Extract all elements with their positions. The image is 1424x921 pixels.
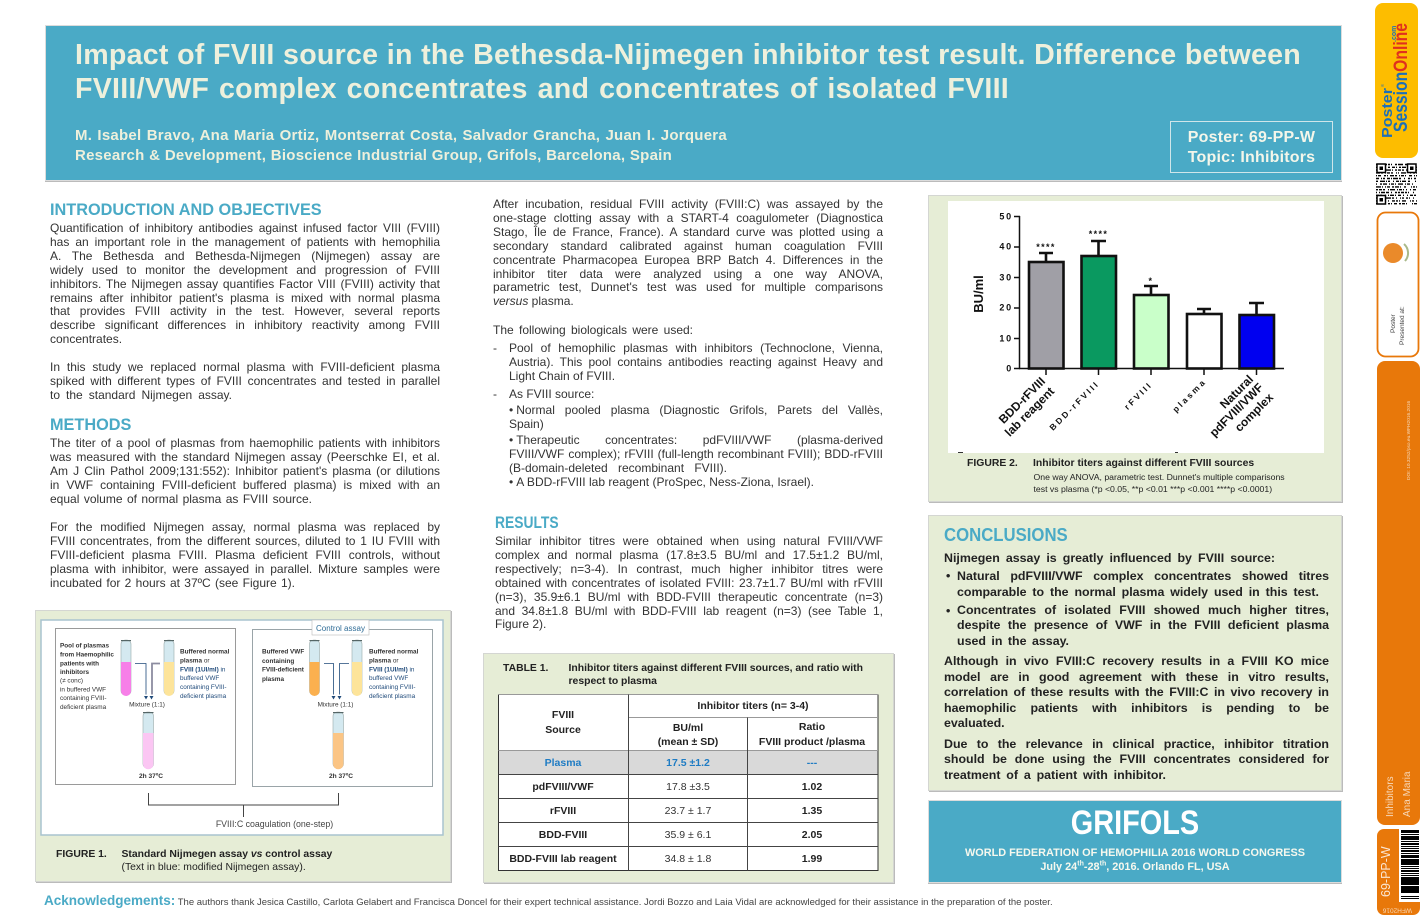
tube: VWF plasma [310,640,320,696]
title [75,39,1301,104]
conclusions text [944,551,1330,782]
x axis category labels: complex [1232,390,1276,435]
table header: Ratio [799,721,825,733]
bar: BDD-rFVIII [1082,241,1116,368]
text: assay and statistics paragraph: Stago, Île de France, France). A standard curve was plotted using a [493,225,883,239]
text: assay and statistics paragraph: concentrate Pharmacopea Europea BRP Batch 4. Differences in the [493,253,883,267]
figure 2 caption: Inhibitor titers against different FVIII sources [1033,458,1254,469]
text: introduction paragraph: Quantification of inhibitory antibodies against infused factor VIII (FVIII) [50,221,440,235]
control assay right label: Buffered normal [369,648,419,656]
significance stars: * [1149,276,1153,286]
standard assay left label: Pool of plasmas [60,642,109,650]
table rows: ratios: 1.02 [802,781,822,793]
control assay left label: Buffered VWF [262,648,304,656]
sidebar [1375,3,1420,915]
panel: figure 1 [35,610,451,882]
text: methods paragraph 1 [50,436,440,506]
control assay box [252,620,432,786]
table header: Source [545,724,581,736]
text: introduction paragraph: A. The Bethesda and Bethesda-Nijmegen (Nijmegen) assay are [50,249,440,263]
presented at text: Poster [1390,313,1397,333]
text: methods paragraph 2: FVIII-deficient plasma FVIII. Plasma deficient FVIII controls, without [50,548,440,562]
x axis category labels: pdFVIII/VWF [1207,380,1266,440]
table rows: titers: 35.9 ± 6.1 [665,829,711,841]
text: introduction paragraph: inhibitors. The Nijmegen assay quantifies Factor VIII (FVIII) activity that [50,277,440,291]
control assay label tab [312,620,369,635]
standard assay left label: from Haemophilic [60,652,114,658]
logo: PosterSessionOnline: .com [1391,26,1398,42]
poster and topic box: Topic: Inhibitors [1188,149,1315,166]
conclusions text: Due to the relevance in clinical practice, inhibitor titration [944,737,1329,751]
y axis: 10 [999,334,1013,344]
acknowledgements: Acknowledgements: The authors thank Jesica Castillo, Carlota Gelabert and Francisca Doncel for their expert technical assistance. Jordi Bozzo and Laia Vidal are acknowledged for their assistance in the preparation of the poster. [44,893,1053,908]
table rows: titers [665,781,711,865]
table header: FVIII [552,709,574,721]
text: results paragraph: Similar inhibitor titres were obtained when using natural FVIII/VWF [495,534,883,548]
figure 2 caption: One way ANOVA, parametric test. Dunnet's multiple comparisons [1034,472,1285,482]
table row: plasma: --- [807,757,818,769]
bar: plasma [1187,309,1222,368]
conclusions text: evaluated. [944,716,1005,730]
text: biologicals list [493,323,883,489]
text: methods paragraph 2 [50,520,440,590]
y axis: 0 [1006,364,1013,374]
title: FVIII/VWF complex concentrates and concentrates of isolated FVIII [75,72,1009,104]
text: methods paragraph 2: FVIII concentrates, from the different sources, diluted to 1 IU FVIII with [50,534,440,548]
text: biologicals list: •Normal pooled plasma (Diagnostic Grifols, Parets del Vallès, [509,403,883,417]
significance stars: **** [1036,242,1056,252]
conclusions text: Concentrates of isolated FVIII showed much higher titres, [957,603,1329,617]
footer banner: Grifols [929,801,1341,882]
heading: methods: METHODS [50,416,131,434]
congress presentation card: Presented at: [1399,306,1406,345]
mixture label: Mixture (1:1) [129,702,165,708]
text: results paragraph: respectively; n=3-4). In contrast, much higher inhibitor titres were [495,562,883,576]
conclusions text: Nijmegen assay is greatly influenced by FVIII source: [944,551,1275,565]
text: biologicals list: (B-domain-deleted recombinant FVIII). [509,461,727,475]
text: assay and statistics paragraph: inhibitor titer data were analyzed using a one way ANOVA, [493,267,883,281]
control assay right label: containing FVIII- [369,684,416,691]
table 1 caption [503,663,863,687]
standard assay right label: containing FVIII- [180,684,227,691]
y axis: 30 [999,272,1013,282]
text: results paragraph: Figure 2). [495,617,546,631]
x axis category labels: rFVIII [1122,379,1154,412]
text: introduction paragraph: describe significant differences in inhibitory reactivity among FVIII [50,318,440,332]
panel: conclusions [928,515,1342,791]
text: introduction paragraph: concentrates. [50,332,122,346]
text: biologicals list: •Therapeutic concentrates: pdFVIII/VWF (plasma-derived [509,433,883,447]
text: introduction paragraph: remains after inhibitor patient's plasma is mixed with normal plasma [50,291,440,305]
x axis category labels [996,372,1276,440]
control mixture label: Mixture (1:1) [318,702,353,708]
figure 1 caption: FIGURE 1. [56,849,107,860]
bar: natural pdFVIII/VWF complex [1240,303,1274,368]
table rows: ratios [802,781,822,865]
heading: conclusions: CONCLUSIONS [944,525,1068,545]
authors and affiliation: M. Isabel Bravo, Ana Maria Ortiz, Montserrat Costa, Salvador Grancha, Juan I. Jorquera [75,127,727,144]
standard assay left label: (≠ conc) [60,678,83,684]
text: methods paragraph 2: incubated for 2 hours at 37ºC (see Figure 1). [50,576,295,590]
bar: rFVIII [1134,286,1168,368]
text: results paragraph [495,534,883,631]
figure 1 caption: Standard Nijmegen assay vs control assay [122,849,332,860]
arrows to mixture [135,664,160,700]
text: methods paragraph 1: in VWF containing FVIII-deficient buffered plasma) is mixed with an [50,478,440,492]
standard assay right label: Buffered normal [180,648,230,656]
text: biologicals list: •A BDD-rFVIII lab reagent (ProSpec, Ness-Ziona, Israel). [509,475,814,489]
congress name and dates: July 24th-28th, 2016. Orlando FL, USA [1040,860,1230,873]
text: biologicals list: Austria). This pool contains antibodies reacting against Heavy and [509,355,883,369]
table rows: ratios: 1.99 [802,853,822,865]
conclusions text: • [946,604,950,618]
logo: PosterSessionOnline: SessionOnline [1391,23,1412,132]
x axis category labels: Natural [1217,372,1256,411]
conclusions text: correlation of these results with the FVIII:C in vivo recovery in [944,685,1329,699]
table header: Inhibitor titers (n= 3-4) [697,700,809,712]
y axis title: BU/ml [971,275,986,313]
table header: FVIII product /plasma [759,736,865,748]
heading: introduction and objectives: INTRODUCTION AND OBJECTIVES [50,201,322,219]
text: results paragraph: obtained with concentrates of isolated FVIII: 23.7±1.7 BU/ml with rFVIII [495,576,883,590]
text: study aim paragraph [50,360,440,402]
text: assay and statistics paragraph: versus plasma. [493,294,574,308]
congress name and dates: WORLD FEDERATION OF HEMOPHILIA 2016 WORLD CONGRESS [965,847,1305,859]
bracket joining both assays [148,793,338,817]
standard assay box [56,628,236,784]
Grifols wordmark: GRIFOLS [1071,804,1199,842]
text: introduction paragraph [50,221,440,346]
text: results paragraph: (n=3), 35.9±6.1 BU/ml with BDD-FVIII therapeutic concentrate (n=3) [495,590,883,604]
text: introduction paragraph: widely used to monitor the development and progression of FVIII [50,263,440,277]
poster and topic box: Poster: 69-PP-W [1188,129,1315,146]
text: study aim paragraph: to the standard Nijmegen assay. [50,388,232,402]
poster and topic box [1170,121,1333,173]
text: results paragraph: and 34.8±1.8 BU/ml with BDD-FVIII lab reagent (n=3) (see Table 1, [495,604,883,618]
control assay left label: FVIII-deficient [262,666,305,674]
table rows: ratios: 1.35 [802,805,822,817]
control assay right label: buffered VWF [369,675,408,682]
x axis [1019,368,1284,375]
conclusions text: • [946,569,950,583]
panel: table 1 [483,653,894,883]
table rows: source names [509,781,617,865]
text: biologicals list: - [493,341,497,355]
orange topic strip: Inhibitors [1385,776,1396,817]
poster ID tab with barcode: WFH2016 [1382,906,1412,914]
text: biologicals list: Pool of hemophilic plasmas with inhibitors (Technoclone, Vienna, [509,341,883,355]
table rows: source names: pdFVIII/VWF [532,781,594,793]
table row: plasma: Plasma [545,757,582,769]
text: biologicals list: The following biologicals were used: [493,323,693,337]
conclusions text: despite the presence of VWF in the FVIII deficient plasma [957,618,1329,632]
figure 1 diagram [40,619,444,836]
table rows: titers: 23.7 ± 1.7 [665,805,711,817]
text: study aim paragraph: In this study we replaced normal plasma with FVIII-deficient plasma [50,360,440,374]
standard assay right label: plasma or [180,658,210,664]
text: assay and statistics paragraph: secondary standard calibrated against human coagulation FVIII [493,239,883,253]
text: methods paragraph 1: was measured with the standard Nijmegen assay (Peerschke EI, et al. [50,450,440,464]
standard assay left label: inhibitors [60,669,90,676]
table header: (mean ± SD) [658,736,718,748]
table 1 data [498,694,878,871]
standard assay right label: FVIII (1UI/ml) in [180,666,225,674]
control assay right label: deficient plasma [369,693,416,700]
text: biologicals list: As FVIII source: [509,387,594,401]
text: methods paragraph 2: plasma with inhibitor, were assayed in parallel. Mixture samples were [50,562,440,576]
authors and affiliation [75,127,727,164]
text: introduction paragraph: that provides FVIII activity in the test. However, several reports [50,304,440,318]
conclusions text: used in the assay. [957,634,1069,648]
heading: results: RESULTS [495,514,559,532]
figure 2 caption: test vs plasma (*p <0.05, **p <0.01 ***p <0.001 ****p <0.0001) [1034,484,1272,494]
tube: mixture [143,712,154,769]
logo: PosterSessionOnline: Poster [1379,88,1396,138]
conclusions text: should be done using the FVIII concentrates considered for [944,752,1329,766]
title: Impact of FVIII source in the Bethesda-Nijmegen inhibitor test result. Difference between [75,39,1301,71]
figure 1 caption: (Text in blue: modified Nijmegen assay). [122,862,306,872]
table rows: source names: rFVIII [550,805,576,817]
table rows: titers: 17.8 ±3.5 [666,781,710,793]
table 1 caption: respect to plasma [568,676,657,687]
x axis category labels: lab reagent [1002,384,1057,439]
poster ID tab with barcode [1377,829,1420,915]
standard assay left label: patients with [60,660,99,668]
text: biologicals list: Spain) [509,417,544,431]
orange topic strip [1377,361,1420,825]
control assay left label: plasma [262,676,284,683]
orange topic strip: DOI: 10.3252/pso.eu.WFH2016.2016 [1406,400,1412,480]
text: biologicals list: - [493,387,497,401]
table header: BU/ml [673,722,703,734]
QR code [1376,163,1417,205]
table 1 caption: Inhibitor titers against different FVIII sources, and ratio with [568,663,863,674]
text: assay and statistics paragraph: one-stage clotting assay with a START-4 coagulometer (Diagnostica [493,211,883,225]
figure 2 caption [967,458,1285,494]
text: biologicals list: Light Chain of FVIII. [509,369,615,383]
tube: buffered normal plasma [164,640,174,696]
control assay right label: plasma or [369,658,398,664]
conclusions text: treatment of a patient with inhibitor. [944,768,1166,782]
y axis: 50 [999,212,1013,222]
tube: inhibitor plasma [121,640,131,696]
text: methods paragraph 1: Am J Clin Pathol 2009;131:552): Inhibitor patient's plasma (or dilutions [50,464,440,478]
conclusions text: Although in vivo FVIII:C recovery results in a FVIII KO mice [944,654,1329,668]
text: methods paragraph 1: equal volume of normal plasma as FVIII source. [50,492,312,506]
conclusions text: model are in good agreement with these in vitro results, [944,670,1329,684]
tube: buffered normal plasma control [352,640,362,696]
text: results paragraph: complex and normal plasma (17.8±3.5 BU/ml and 17.5±1.2 BU/ml, [495,548,883,562]
x axis category labels: BDD-rFVIII [1047,378,1101,432]
standard assay left label: deficient plasma [60,704,107,711]
congress presentation card [1378,212,1418,356]
arrows to control mixture [324,664,349,700]
standard assay right label: buffered VWF [180,675,219,682]
text: methods paragraph 2: For the modified Nijmegen assay, normal plasma was replaced by [50,520,440,534]
logo: PosterSessionOnline [1375,3,1418,158]
standard assay right label: deficient plasma [180,693,227,700]
table header [545,700,865,748]
y axis: 20 [999,302,1013,312]
table rows: source names: BDD-FVIII lab reagent [509,853,617,865]
table rows: ratios: 2.05 [802,829,822,841]
figure 1 caption [56,849,332,872]
table row: plasma: 17.5 ±1.2 [666,757,710,769]
control incubation label: 2h 37ºC [329,773,353,780]
congress name and dates [965,847,1305,873]
control assay right label: FVIII (1UI/ml) in [369,666,414,674]
text: assay and statistics paragraph: After incubation, residual FVIII activity (FVIII:C) was assayed by the [493,197,883,211]
text: assay and statistics paragraph: parametric test, Dunnet's test was used for multiple comparisons [493,280,883,294]
orange topic strip: Ana Maria [1402,771,1413,817]
poster ID tab with barcode: 69-PP-W [1379,846,1393,897]
control assay left label: containing [262,658,294,665]
text: study aim paragraph: spiked with different types of FVIII concentrates and tested in parallel [50,374,440,388]
conclusions text: Natural pdFVIII/VWF complex concentrates showed titres [957,569,1329,583]
significance stars: **** [1089,229,1108,239]
text: introduction paragraph: has an important role in the management of patients with hemophilia [50,235,440,249]
x axis category labels: plasma [1170,376,1208,414]
significance stars [1036,229,1153,286]
x axis category labels: BDD-rFVIII [996,374,1048,427]
y axis: 40 [999,242,1013,252]
table rows: source names: BDD-FVIII [539,829,587,841]
tube: control mixture [333,712,344,769]
authors and affiliation: Research & Development, Bioscience Industrial Group, Grifols, Barcelona, Spain [75,147,672,164]
table row: plasma [545,757,818,769]
figure 2 caption: FIGURE 2. [967,458,1018,469]
table 1 caption: TABLE 1. [503,663,548,674]
table rows: titers: 34.8 ± 1.8 [665,853,711,865]
bar chart [948,201,1324,453]
standard assay left label: containing FVIII- [60,695,107,702]
bar: BDD-rFVIII lab reagent [1029,253,1064,368]
coagulation label: FVIII:C coagulation (one-step) [216,819,333,829]
conclusions text: haemophilic patients with inhibitors is pending to be [944,701,1329,715]
y axis [999,212,1020,374]
text: methods paragraph 1: The titer of a pool of plasmas from haemophilic patients with inhibitors [50,436,440,450]
incubation label: 2h 37ºC [139,773,163,780]
text: assay and statistics paragraph [493,197,884,308]
standard assay left label: in buffered VWF [60,686,106,694]
text: biologicals list: FVIII/VWF complex); rFVIII (full-length recombinant FVIII); BDD-rFVIII [509,447,883,461]
panel: figure 2 [928,195,1342,502]
control assay label tab: Control assay [316,624,365,633]
congress logo [1383,243,1403,263]
header banner [46,26,1341,180]
logo: PosterSessionOnline: ® [1380,84,1385,87]
conclusions text: comparable to the normal plasma widely used in this test. [957,585,1319,599]
